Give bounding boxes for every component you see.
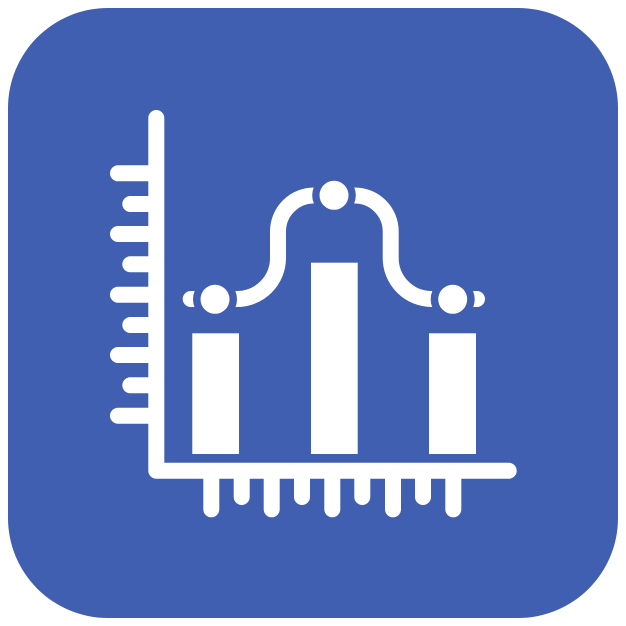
gaps around data points (193, 174, 475, 321)
axis lines (156, 118, 509, 471)
chart axes with tick marks (118, 118, 509, 509)
x-axis ticks (211, 471, 453, 509)
left bar (192, 333, 239, 454)
bars (192, 263, 476, 454)
data points (200, 181, 467, 314)
curve line (191, 195, 477, 299)
middle bar (311, 263, 358, 454)
y-axis ticks (118, 173, 156, 416)
right bar (429, 333, 476, 454)
bell curve with data points (191, 174, 477, 321)
